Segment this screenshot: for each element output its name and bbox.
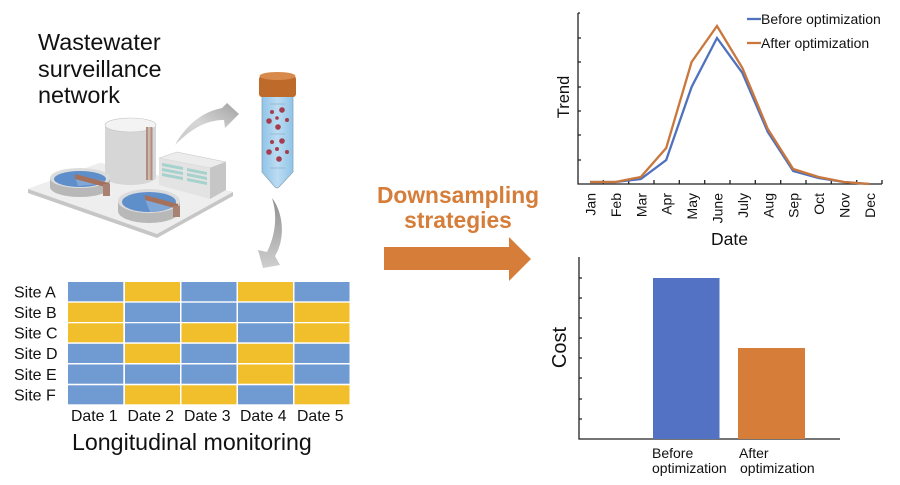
heading: downsampling strategies: strategies [404,207,512,233]
heatmap date labels: Date 5 [297,408,344,425]
axis label: Trend: Trend [555,76,573,118]
arrow: plant to sample tube [175,103,239,145]
series: after optimization [590,26,869,184]
month labels: Jan [582,193,598,216]
legend: Before optimization [761,11,881,27]
heatmap date labels [71,408,344,425]
heatmap site labels [14,284,58,404]
bar: before optimization [653,278,720,439]
line chart: trend by month [555,11,882,249]
row: Site B [68,303,350,322]
heatmap date labels: Date 4 [240,408,287,425]
icon: wastewater treatment plant [28,118,233,238]
heatmap date labels: Date 3 [184,408,231,425]
month labels: Oct [811,193,827,215]
row: Site E [68,364,350,384]
axis label: Cost: Cost [549,326,571,368]
bar label: before optimization: optimization [652,460,727,476]
title: wastewater surveillance network: Wastewater [38,29,161,55]
series: before optimization [590,38,869,184]
chart axes [578,13,882,184]
month labels: July [735,193,751,218]
month labels: Nov [836,193,852,218]
heading: downsampling strategies [377,182,539,233]
month labels: May [684,193,700,219]
bar label: after optimization [739,445,815,476]
heading: downsampling strategies: Downsampling [377,182,539,208]
row: Site A [68,282,350,301]
chart axes [579,257,840,439]
legend: After optimization [761,35,869,51]
month labels: June [710,193,726,223]
arrow: sample tube to monitoring table [258,198,282,268]
month labels: Sep [786,193,802,218]
title: wastewater surveillance network: surveillance [38,56,162,82]
row: Site D [68,344,350,363]
heatmap site labels: Site C [14,326,58,342]
heatmap date labels: Date 2 [128,408,174,425]
month labels: Dec [862,193,878,218]
heatmap site labels: Site D [14,346,58,363]
bar label: after optimization: After [739,445,769,461]
heatmap date labels: Date 1 [71,408,118,425]
month labels: Apr [659,193,675,215]
row: Site F [68,385,350,404]
month labels: Feb [608,193,624,217]
heatmap site labels: Site E [14,367,57,384]
title: wastewater surveillance network: network [38,82,120,108]
month labels: Aug [760,193,776,218]
bar label: after optimization: optimization [740,460,815,476]
heatmap: sites by dates [68,282,350,404]
month labels [582,193,878,223]
icon: sample tube with virus particles [259,72,296,188]
bar label: before optimization: Before [652,445,693,461]
legend [747,11,881,51]
arrow: downsampling [384,237,531,281]
month labels: Mar [633,193,649,217]
axis label: Date: Date [711,229,748,249]
row: Site C [68,323,350,342]
bar chart: cost [549,257,840,476]
heatmap site labels: Site F [14,388,56,404]
title: wastewater surveillance network [38,29,162,108]
heading: longitudinal monitoring: Longitudinal monitoring [72,429,312,455]
heatmap site labels: Site B [14,305,57,322]
heatmap site labels: Site A [14,284,56,302]
bar: after optimization [738,348,805,439]
bar label: before optimization [652,445,727,476]
